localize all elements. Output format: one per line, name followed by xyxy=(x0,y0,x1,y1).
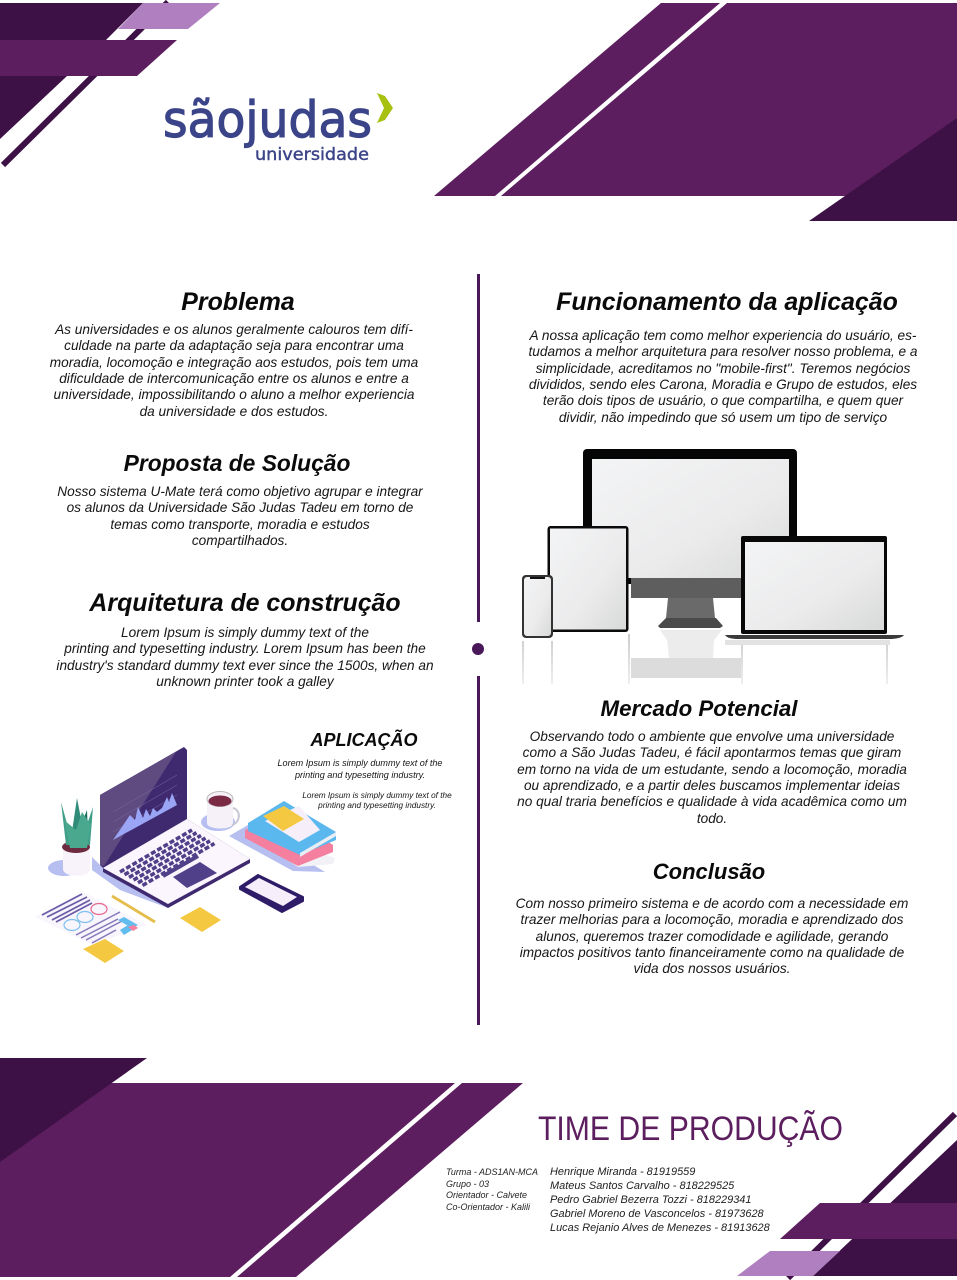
text: class info xyxy=(446,1167,538,1212)
text: team names xyxy=(550,1166,770,1234)
text: Arquitetura de construção: Lorem Ipsum is simply dummy text of the xyxy=(121,625,369,640)
text: Funcionamento: A nossa aplicação tem como melhor experiencia do usuário, es- xyxy=(530,328,916,343)
text: Conclusão: trazer melhorias para a locomoção, moradia e aprendizado dos xyxy=(521,912,903,927)
heading: Arquitetura de construção: Arquitetura de construção xyxy=(89,589,401,617)
text: Problema: dificuldade de intercomunicação entre os alunos e entre a xyxy=(59,371,409,386)
pencil xyxy=(112,896,155,922)
text: Proposta de Solução xyxy=(57,484,424,548)
text: Arquitetura de construção: industry's standard dummy text ever since the 1500s, when an xyxy=(56,658,434,673)
text: Proposta de Solução: os alunos da Universidade São Judas Tadeu em torno de xyxy=(67,500,413,515)
text: Problema: culdade na parte da adaptação seja para encontrar uma xyxy=(64,338,404,353)
text: class info: Turma - ADS1AN-MCA xyxy=(446,1167,538,1177)
text: Aplicação first: printing and typesetting industry. xyxy=(295,770,425,780)
text: Problema: moradia, locomoção e integração aos estudos, pois tem uma xyxy=(50,355,418,370)
phone xyxy=(522,575,553,638)
heading: Mercado Potencial: Mercado Potencial xyxy=(600,696,798,721)
text: Aplicação first: Lorem Ipsum is simply dummy text of the xyxy=(278,758,442,768)
text: Problema: As universidades e os alunos geralmente calouros tem difí- xyxy=(55,322,413,337)
heading: Aplicação: APLICAÇÃO xyxy=(310,730,418,750)
paper with charts xyxy=(35,892,147,945)
text: Aplicação second: printing and typesetting industry. xyxy=(318,801,436,810)
plant xyxy=(61,798,93,876)
text: team names: Gabriel Moreno de Vasconcelos - 81973628 xyxy=(550,1208,764,1220)
text: class info: Co-Orientador - Kalili xyxy=(446,1202,530,1212)
text: Funcionamento xyxy=(528,328,917,425)
heading: Proposta de Solução: Proposta de Solução xyxy=(124,450,350,476)
text: Mercado Potencial: ou aprendizado, e a partir deles buscamos implementar ideias xyxy=(524,778,900,793)
text: Problema: universidade, impossibilitando o aluno a melhor experiencia xyxy=(54,387,414,402)
laptop xyxy=(100,747,250,908)
text: team names: Henrique Miranda - 81919559 xyxy=(550,1166,695,1178)
text: Mercado Potencial: todo. xyxy=(697,811,727,826)
shadows xyxy=(48,813,325,908)
text: Conclusão: Com nosso primeiro sistema e de acordo com a necessidade em xyxy=(516,896,908,911)
tablet xyxy=(548,526,628,632)
text: Problema: da universidade e dos estudos. xyxy=(140,404,328,419)
monitor xyxy=(583,449,797,628)
logo: São Judas universidade: sãojudas xyxy=(163,91,372,149)
text: Conclusão: vida dos nossos usuários. xyxy=(634,961,790,976)
text: Funcionamento: dividir, não impedindo que só usem um tipo de serviço xyxy=(559,410,887,425)
text: Mercado Potencial: em torno na vida de um estudante, sendo a locomoção, moradia xyxy=(517,762,907,777)
heading: Funcionamento da aplicação: Funcionamento da aplicação xyxy=(556,288,898,316)
text: Mercado Potencial: como a São Judas Tadeu, é fácil apontarmos temas que giram xyxy=(523,745,901,760)
text: team names: Lucas Rejanio Alves de Menezes - 81913628 xyxy=(550,1222,770,1234)
text: Funcionamento: tudamos a melhor arquitetura para resolver nosso problema, e a xyxy=(529,344,917,359)
text: Funcionamento: simplicidade, acreditamos no "mobile-first". Teremos negócios xyxy=(536,361,910,376)
text: Mercado Potencial xyxy=(517,729,907,826)
phone xyxy=(240,875,303,912)
heading: Time de Produção: TIME DE PRODUÇÃO xyxy=(538,1110,843,1148)
text: Funcionamento: divididos, sendo eles Carona, Moradia e Grupo de estudos, eles xyxy=(529,377,917,392)
text: Proposta de Solução: compartilhados. xyxy=(192,533,288,548)
text: Arquitetura de construção xyxy=(56,625,434,689)
text: Mercado Potencial: Observando todo o ambiente que envolve uma universidade xyxy=(530,729,894,744)
top-left decoration xyxy=(0,0,220,168)
text: Proposta de Solução: temas como transporte, moradia e estudos xyxy=(110,517,370,532)
laptop xyxy=(725,536,904,639)
text: Aplicação second: Lorem Ipsum is simply dummy text of the xyxy=(302,791,452,800)
text: Aplicação first xyxy=(278,758,442,780)
books xyxy=(245,801,336,867)
text: Conclusão: alunos, queremos trazer comodidade e agilidade, gerando xyxy=(536,929,888,944)
illustration: devices xyxy=(522,449,904,684)
heading: Problema: Problema xyxy=(181,288,295,316)
text: Proposta de Solução: Nosso sistema U-Mate terá como objetivo agrupar e integrar xyxy=(57,484,423,499)
text: Problema xyxy=(50,322,418,419)
text: Aplicação second xyxy=(302,791,452,810)
heading: Conclusão: Conclusão xyxy=(653,859,765,884)
top-right decoration xyxy=(434,3,957,221)
illustration: isometric laptop desk xyxy=(36,747,336,963)
text: team names: Mateus Santos Carvalho - 818229525 xyxy=(550,1180,734,1192)
sticky notes xyxy=(83,907,221,963)
text: Arquitetura de construção: unknown printer took a galley xyxy=(156,674,334,689)
reflections xyxy=(523,630,890,684)
logo: São Judas universidade: universidade xyxy=(255,145,369,164)
text: team names: Pedro Gabriel Bezerra Tozzi - 818229341 xyxy=(550,1194,751,1206)
text: Mercado Potencial: no qual traria benefícios e qualidade à vida acadêmica como um xyxy=(517,794,907,809)
text: Conclusão xyxy=(516,896,908,976)
text: class info: Grupo - 03 xyxy=(446,1179,489,1189)
text: Funcionamento: terão dois tipos de usuário, o que compartilha, e quem quer xyxy=(543,393,903,408)
text: Conclusão: impactos positivos tanto financeiramente como na qualidade de xyxy=(520,945,904,960)
text: class info: Orientador - Calvete xyxy=(446,1190,527,1200)
mug xyxy=(207,792,239,828)
text: Arquitetura de construção: printing and typesetting industry. Lorem Ipsum has been the xyxy=(64,641,426,656)
